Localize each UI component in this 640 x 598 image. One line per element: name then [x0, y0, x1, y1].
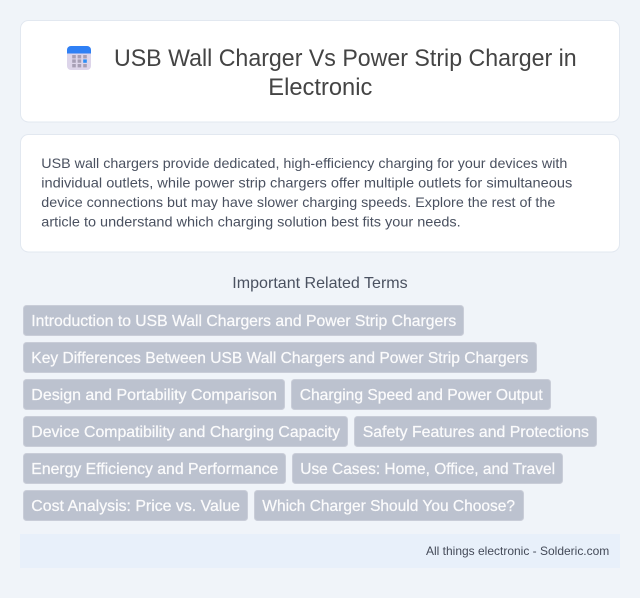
- summary text: individual outlets, while power strip chargers offer multiple outlets for simultaneous: [41, 174, 572, 190]
- footer: All things electronic - Solderic.com: [426, 544, 609, 558]
- panel: related term tags: [24, 306, 596, 520]
- footer: [20, 534, 620, 568]
- tag: energy efficiency: [24, 454, 286, 484]
- tag: charging speed: [292, 380, 550, 410]
- tag: which charger: [254, 490, 524, 520]
- title: Electronic: [268, 74, 372, 101]
- tag: safety features: Safety Features and Protections: [363, 424, 589, 441]
- tag: introduction: [24, 306, 464, 336]
- summary text: [41, 155, 572, 230]
- tag: cost analysis: Cost Analysis: Price vs. Value: [31, 498, 240, 515]
- tag: design and portability: [24, 380, 284, 410]
- icon: calendar: [67, 46, 91, 70]
- tag: cost analysis: [24, 490, 248, 520]
- title: [114, 45, 577, 101]
- tag: use cases: Use Cases: Home, Office, and Travel: [300, 461, 555, 478]
- tag: device compatibility: [24, 416, 348, 446]
- tag: which charger: Which Charger Should You Choose?: [262, 498, 515, 515]
- tag: key differences: [24, 342, 536, 372]
- tag: key differences: Key Differences Between USB Wall Chargers and Power Strip Chargers: [31, 350, 528, 367]
- tag: introduction: Introduction to USB Wall Chargers and Power Strip Chargers: [31, 313, 456, 330]
- summary text: USB wall chargers provide dedicated, high-efficiency charging for your devices with: [41, 155, 567, 171]
- summary text: device connections but may have slower charging speeds. Explore the rest of the: [41, 194, 556, 210]
- tag: energy efficiency: Energy Efficiency and Performance: [31, 461, 278, 478]
- tag: device compatibility: Device Compatibility and Charging Capacity: [31, 424, 340, 441]
- summary text: article to understand which charging solution best fits your needs.: [41, 214, 461, 230]
- tag: design and portability: Design and Portability Comparison: [31, 387, 277, 404]
- panel: summary card: [20, 134, 620, 252]
- tag: use cases: [292, 454, 562, 484]
- heading: important related terms: Important Related Terms: [232, 275, 408, 292]
- title: USB Wall Charger Vs Power Strip Charger in: [114, 45, 577, 72]
- panel: title card: [20, 20, 620, 122]
- tag: safety features: [354, 416, 596, 446]
- tag: charging speed: Charging Speed and Power Output: [300, 387, 543, 404]
